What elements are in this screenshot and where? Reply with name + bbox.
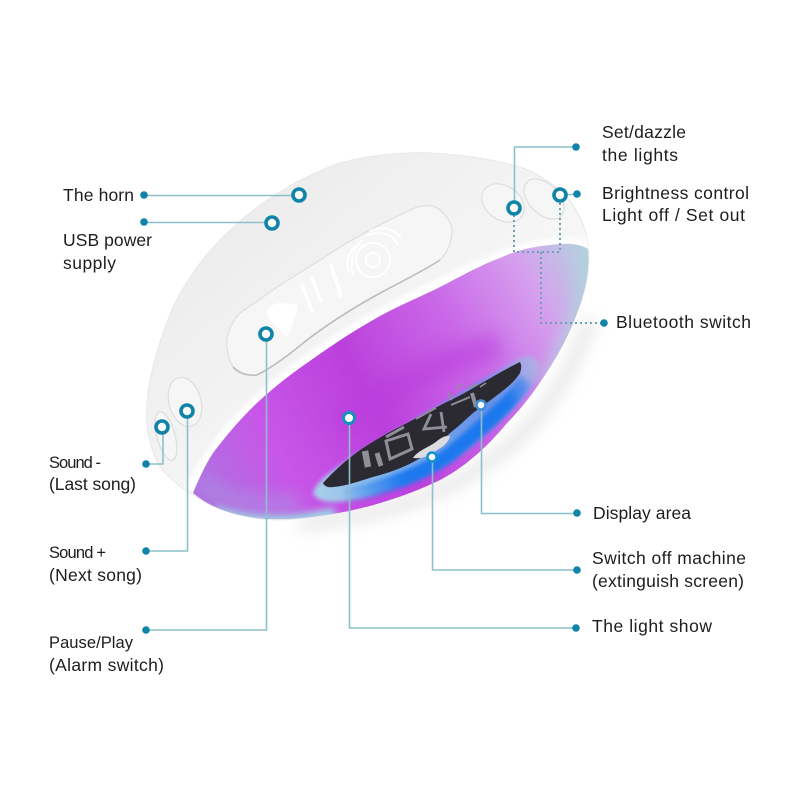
display: dark LCD screen xyxy=(323,362,521,487)
device: alarm clock xyxy=(147,153,600,525)
label: sound minus xyxy=(49,454,136,494)
light ring: purple glow xyxy=(193,244,588,520)
hotspot markers xyxy=(156,189,566,462)
grey teal right edge xyxy=(545,250,585,385)
slash icon xyxy=(331,266,341,296)
lower left teal xyxy=(215,512,335,521)
label: display area: Display area xyxy=(593,503,691,523)
screen lip xyxy=(313,356,539,502)
blue underglow xyxy=(345,380,526,496)
label: the horn: The horn xyxy=(63,185,134,205)
main pause/play button xyxy=(227,206,452,375)
label: pause and play: Pause/Play xyxy=(49,634,134,652)
label: set dazzle lights xyxy=(602,122,686,165)
display button xyxy=(413,436,450,458)
alarm icon xyxy=(348,228,401,277)
right side buttons xyxy=(474,171,572,230)
label: switch off machine: (extinguish screen) xyxy=(592,571,744,591)
white strip above the light band xyxy=(190,243,588,490)
label: the light show: The light show xyxy=(592,616,712,636)
label: sound plus: Sound + xyxy=(49,544,106,562)
device drop shadow xyxy=(300,320,590,525)
label: pause and play: (Alarm switch) xyxy=(49,655,164,675)
lower left lavender xyxy=(200,480,300,503)
label: sound plus xyxy=(49,544,142,585)
button lower edge shadow xyxy=(233,260,440,375)
label: brightness control: Light off / Set out xyxy=(602,205,745,225)
pause icon xyxy=(302,279,321,311)
label: set dazzle lights: the lights xyxy=(602,145,678,165)
device white shell xyxy=(147,153,589,520)
label: switch off machine xyxy=(592,548,746,591)
label: switch off machine: Switch off machine xyxy=(592,548,746,568)
label: sound minus: (Last song) xyxy=(49,474,136,494)
label: sound minus: Sound - xyxy=(49,454,101,472)
label: sound plus: (Next song) xyxy=(49,565,142,585)
leader lines xyxy=(144,147,604,630)
label: USB power supply xyxy=(63,230,152,273)
label: brightness control xyxy=(602,183,749,225)
left side buttons xyxy=(151,374,207,462)
label: USB power supply: USB power xyxy=(63,230,152,250)
label end dots xyxy=(140,143,608,634)
label: set dazzle lights: Set/dazzle xyxy=(602,122,686,142)
label: bluetooth switch: Bluetooth switch xyxy=(616,312,751,332)
label: USB power supply: supply xyxy=(63,253,116,273)
label: pause and play xyxy=(49,634,164,675)
label: brightness control: Brightness control xyxy=(602,183,749,203)
darker arc near the screen xyxy=(394,330,506,392)
display digits xyxy=(365,383,486,467)
play icon xyxy=(267,303,298,337)
